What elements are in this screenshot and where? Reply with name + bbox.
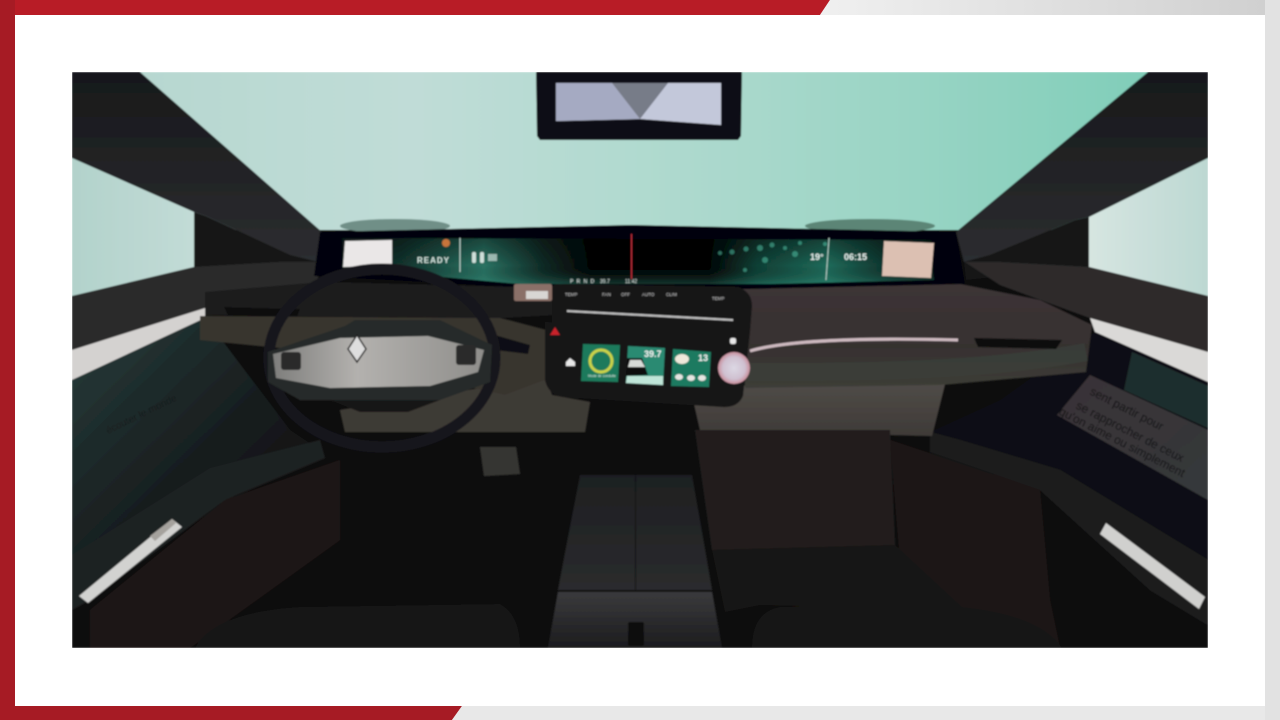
dashboard main surface xyxy=(740,284,1092,388)
centre tunnel xyxy=(585,405,695,470)
tile: range and car: 39.7 xyxy=(644,349,662,359)
left A-pillar xyxy=(72,72,322,262)
display dividers xyxy=(460,238,829,280)
footwell right xyxy=(695,430,895,550)
dashboard lower left fascia xyxy=(340,375,590,432)
climate bar labels: TEMP xyxy=(565,292,578,297)
left door handle light xyxy=(79,519,182,603)
hazard icon xyxy=(550,327,560,335)
climate bar labels: TEMP xyxy=(712,296,725,301)
footwell left xyxy=(340,432,588,600)
climate bar labels: AUTO xyxy=(642,292,655,297)
left door lower carpet xyxy=(90,460,340,648)
status row: P R N D xyxy=(570,279,595,285)
tile: range and car xyxy=(626,346,665,385)
left lower door armrest xyxy=(72,440,325,610)
right air vent xyxy=(974,338,1062,349)
right door base xyxy=(934,333,1208,559)
hood reflections xyxy=(340,219,450,233)
frame: bottom red bar xyxy=(0,706,462,720)
temperature: 19° xyxy=(810,252,824,262)
right door upper panel xyxy=(965,262,1208,352)
lock icon xyxy=(730,338,736,344)
left door text: écouter le monde xyxy=(104,393,179,437)
left seat xyxy=(195,604,520,648)
control knob xyxy=(718,352,750,384)
tile: weather: 13 xyxy=(698,353,708,363)
centre red marker xyxy=(631,234,632,279)
right door text: qu'on aime ou simplement xyxy=(1057,404,1188,480)
right white door strip xyxy=(1090,318,1208,382)
right door text: se rapprocher de ceux xyxy=(1074,398,1186,465)
right door lower carpet xyxy=(890,440,1060,648)
photo: car interior xyxy=(72,72,1208,648)
right door text: sent partir pour xyxy=(1088,384,1166,433)
centre touch console xyxy=(545,322,750,407)
frame: top grey bar xyxy=(820,0,1280,15)
centre cluster upper module xyxy=(514,284,752,332)
climate bar labels xyxy=(565,292,725,301)
windshield sky xyxy=(139,72,1149,232)
left white door strip xyxy=(72,308,205,380)
interior base xyxy=(72,230,1208,648)
right door patch xyxy=(1057,375,1208,500)
right door handle light xyxy=(1100,523,1205,609)
climate bar labels: CLIM xyxy=(666,292,677,297)
left air vent xyxy=(225,308,299,316)
left camera view xyxy=(343,240,392,267)
logo xyxy=(348,335,366,362)
right side window xyxy=(1089,158,1208,296)
display bokeh lights xyxy=(718,241,827,272)
dashboard top display: 39.7 xyxy=(600,279,610,285)
tile: battery ring xyxy=(581,344,620,382)
right pillar inner trim xyxy=(964,217,1089,280)
battery gauges xyxy=(472,252,497,263)
left door upper panel xyxy=(72,262,318,350)
steering wheel xyxy=(268,269,495,447)
frame: right grey bar xyxy=(1265,0,1280,720)
climate bar labels: FAN xyxy=(602,292,611,297)
rear-view display xyxy=(536,72,742,140)
dashboard left fascia xyxy=(200,316,546,395)
home icon xyxy=(566,358,575,366)
frame: top red bar xyxy=(0,0,830,15)
right camera view xyxy=(882,241,934,278)
READY label: READY xyxy=(417,256,450,265)
centre console xyxy=(548,475,722,648)
right door teal patch xyxy=(1124,352,1208,428)
floor mat right xyxy=(712,545,965,612)
dashboard lower grey panel xyxy=(690,384,945,436)
frame: bottom grey bar xyxy=(452,706,1280,720)
left door panel xyxy=(72,318,320,560)
dashboard top display: 11:42 xyxy=(625,279,637,285)
climate bar labels: OFF xyxy=(621,292,630,297)
dashboard right dark-green band xyxy=(748,352,1086,372)
dashboard right glow trim xyxy=(750,339,958,351)
frame: left red bar xyxy=(0,0,15,720)
right A-pillar xyxy=(956,72,1208,262)
dashboard left top bar xyxy=(205,282,552,318)
left pillar inner trim xyxy=(194,212,318,270)
left side window xyxy=(72,206,196,297)
vent slit xyxy=(567,310,733,321)
dark stalk right of wheel xyxy=(495,335,530,354)
tile: battery ring: Mode de conduite xyxy=(588,374,616,378)
tile: weather xyxy=(671,349,711,387)
pedal xyxy=(480,447,520,476)
clock: 06:15 xyxy=(844,252,867,262)
dashboard top display xyxy=(314,225,965,289)
right lower door armrest xyxy=(930,432,1208,625)
right seat xyxy=(752,607,1062,648)
gear indicator xyxy=(442,239,450,247)
